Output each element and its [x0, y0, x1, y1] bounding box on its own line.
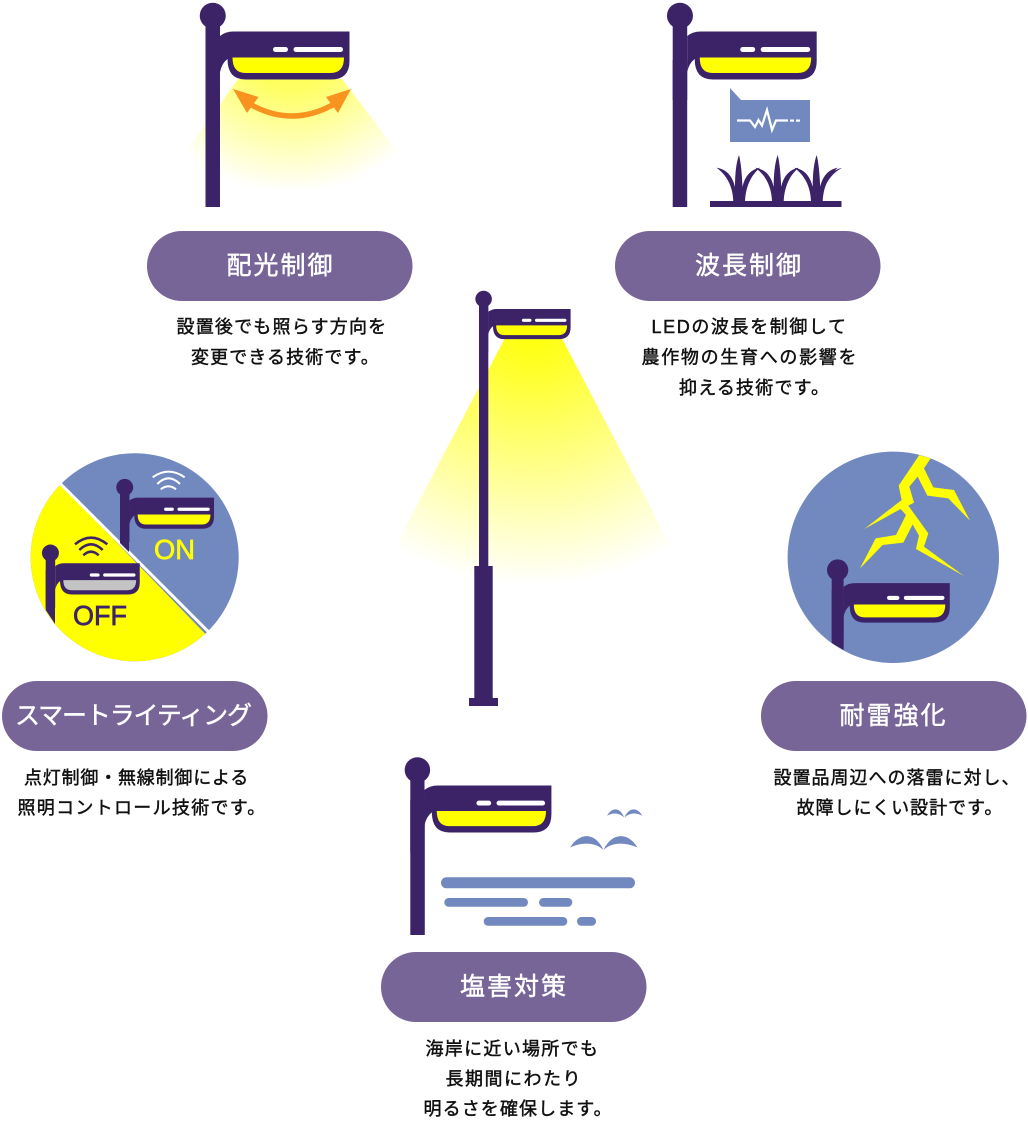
street lamp	[667, 3, 817, 207]
description: 点灯制御・無線制御による	[24, 768, 249, 788]
label group: wavelength control	[615, 231, 880, 398]
icon: wifi purple	[75, 538, 107, 555]
OFF lamp	[42, 545, 140, 624]
description: 設置後でも照らす方向を	[176, 317, 387, 337]
icon: seagulls	[570, 809, 642, 850]
illustration: central street lamp	[367, 291, 699, 706]
description	[18, 768, 267, 818]
blue half	[31, 453, 239, 661]
divider	[58, 481, 210, 633]
illustration: lightning resistance circle	[788, 452, 999, 663]
illustration: light distribution control	[160, 3, 425, 207]
pill heading	[615, 231, 880, 301]
description: 農作物の生育への影響を	[642, 348, 858, 368]
icon: speech box with waveform	[730, 88, 810, 142]
icon: lightning bolt	[860, 455, 970, 576]
pill heading	[2, 681, 268, 751]
pill heading: 耐雷強化	[839, 702, 948, 730]
label group: lightning resistance	[761, 681, 1026, 818]
icon: double-headed orange arrow	[233, 89, 351, 116]
description: 海岸に近い場所でも	[426, 1039, 599, 1059]
label group: smart lighting	[2, 681, 268, 818]
lamp head	[475, 291, 571, 352]
pill heading	[381, 952, 646, 1022]
pill heading	[147, 231, 412, 301]
description: 照明コントロール技術です。	[18, 798, 267, 818]
illustration: wavelength control	[667, 3, 842, 207]
description: 故障しにくい設計です。	[796, 798, 1003, 818]
street lamp	[405, 757, 551, 935]
description: 抑える技術です。	[679, 378, 830, 398]
description: 設置品周辺への落雷に対し、	[774, 768, 1020, 788]
pill heading: 配光制御	[226, 252, 335, 280]
description	[642, 317, 858, 398]
blue circle	[788, 452, 999, 663]
description: 変更できる技術です。	[191, 348, 380, 368]
label OFF: OFF	[73, 600, 127, 631]
icon: wifi white	[153, 472, 185, 489]
icon: grass	[710, 155, 842, 207]
pill heading	[761, 681, 1026, 751]
light cone	[367, 338, 699, 600]
label group: light distribution control	[147, 231, 412, 368]
pill heading: 波長制御	[695, 252, 803, 280]
description: 明るさを確保します。	[424, 1099, 613, 1119]
description	[424, 1039, 613, 1119]
illustration: smart lighting on/off circle	[30, 453, 239, 662]
description: LEDの波長を制御して	[652, 317, 848, 337]
pole and base	[469, 300, 498, 706]
pill heading: 塩害対策	[460, 973, 568, 1001]
yellow half	[30, 485, 206, 662]
description: 長期間にわたり	[446, 1069, 582, 1089]
street lamp	[200, 3, 350, 207]
light cone	[160, 79, 425, 188]
ON lamp	[116, 479, 214, 552]
label group: salt damage protection	[381, 952, 646, 1119]
label ON: ON	[154, 534, 195, 565]
description	[774, 768, 1020, 818]
illustration: salt damage protection	[405, 757, 642, 935]
lamp	[827, 559, 950, 650]
description	[176, 317, 387, 368]
pill heading: スマートライティング	[15, 702, 252, 730]
icon: sea waves	[441, 877, 635, 926]
